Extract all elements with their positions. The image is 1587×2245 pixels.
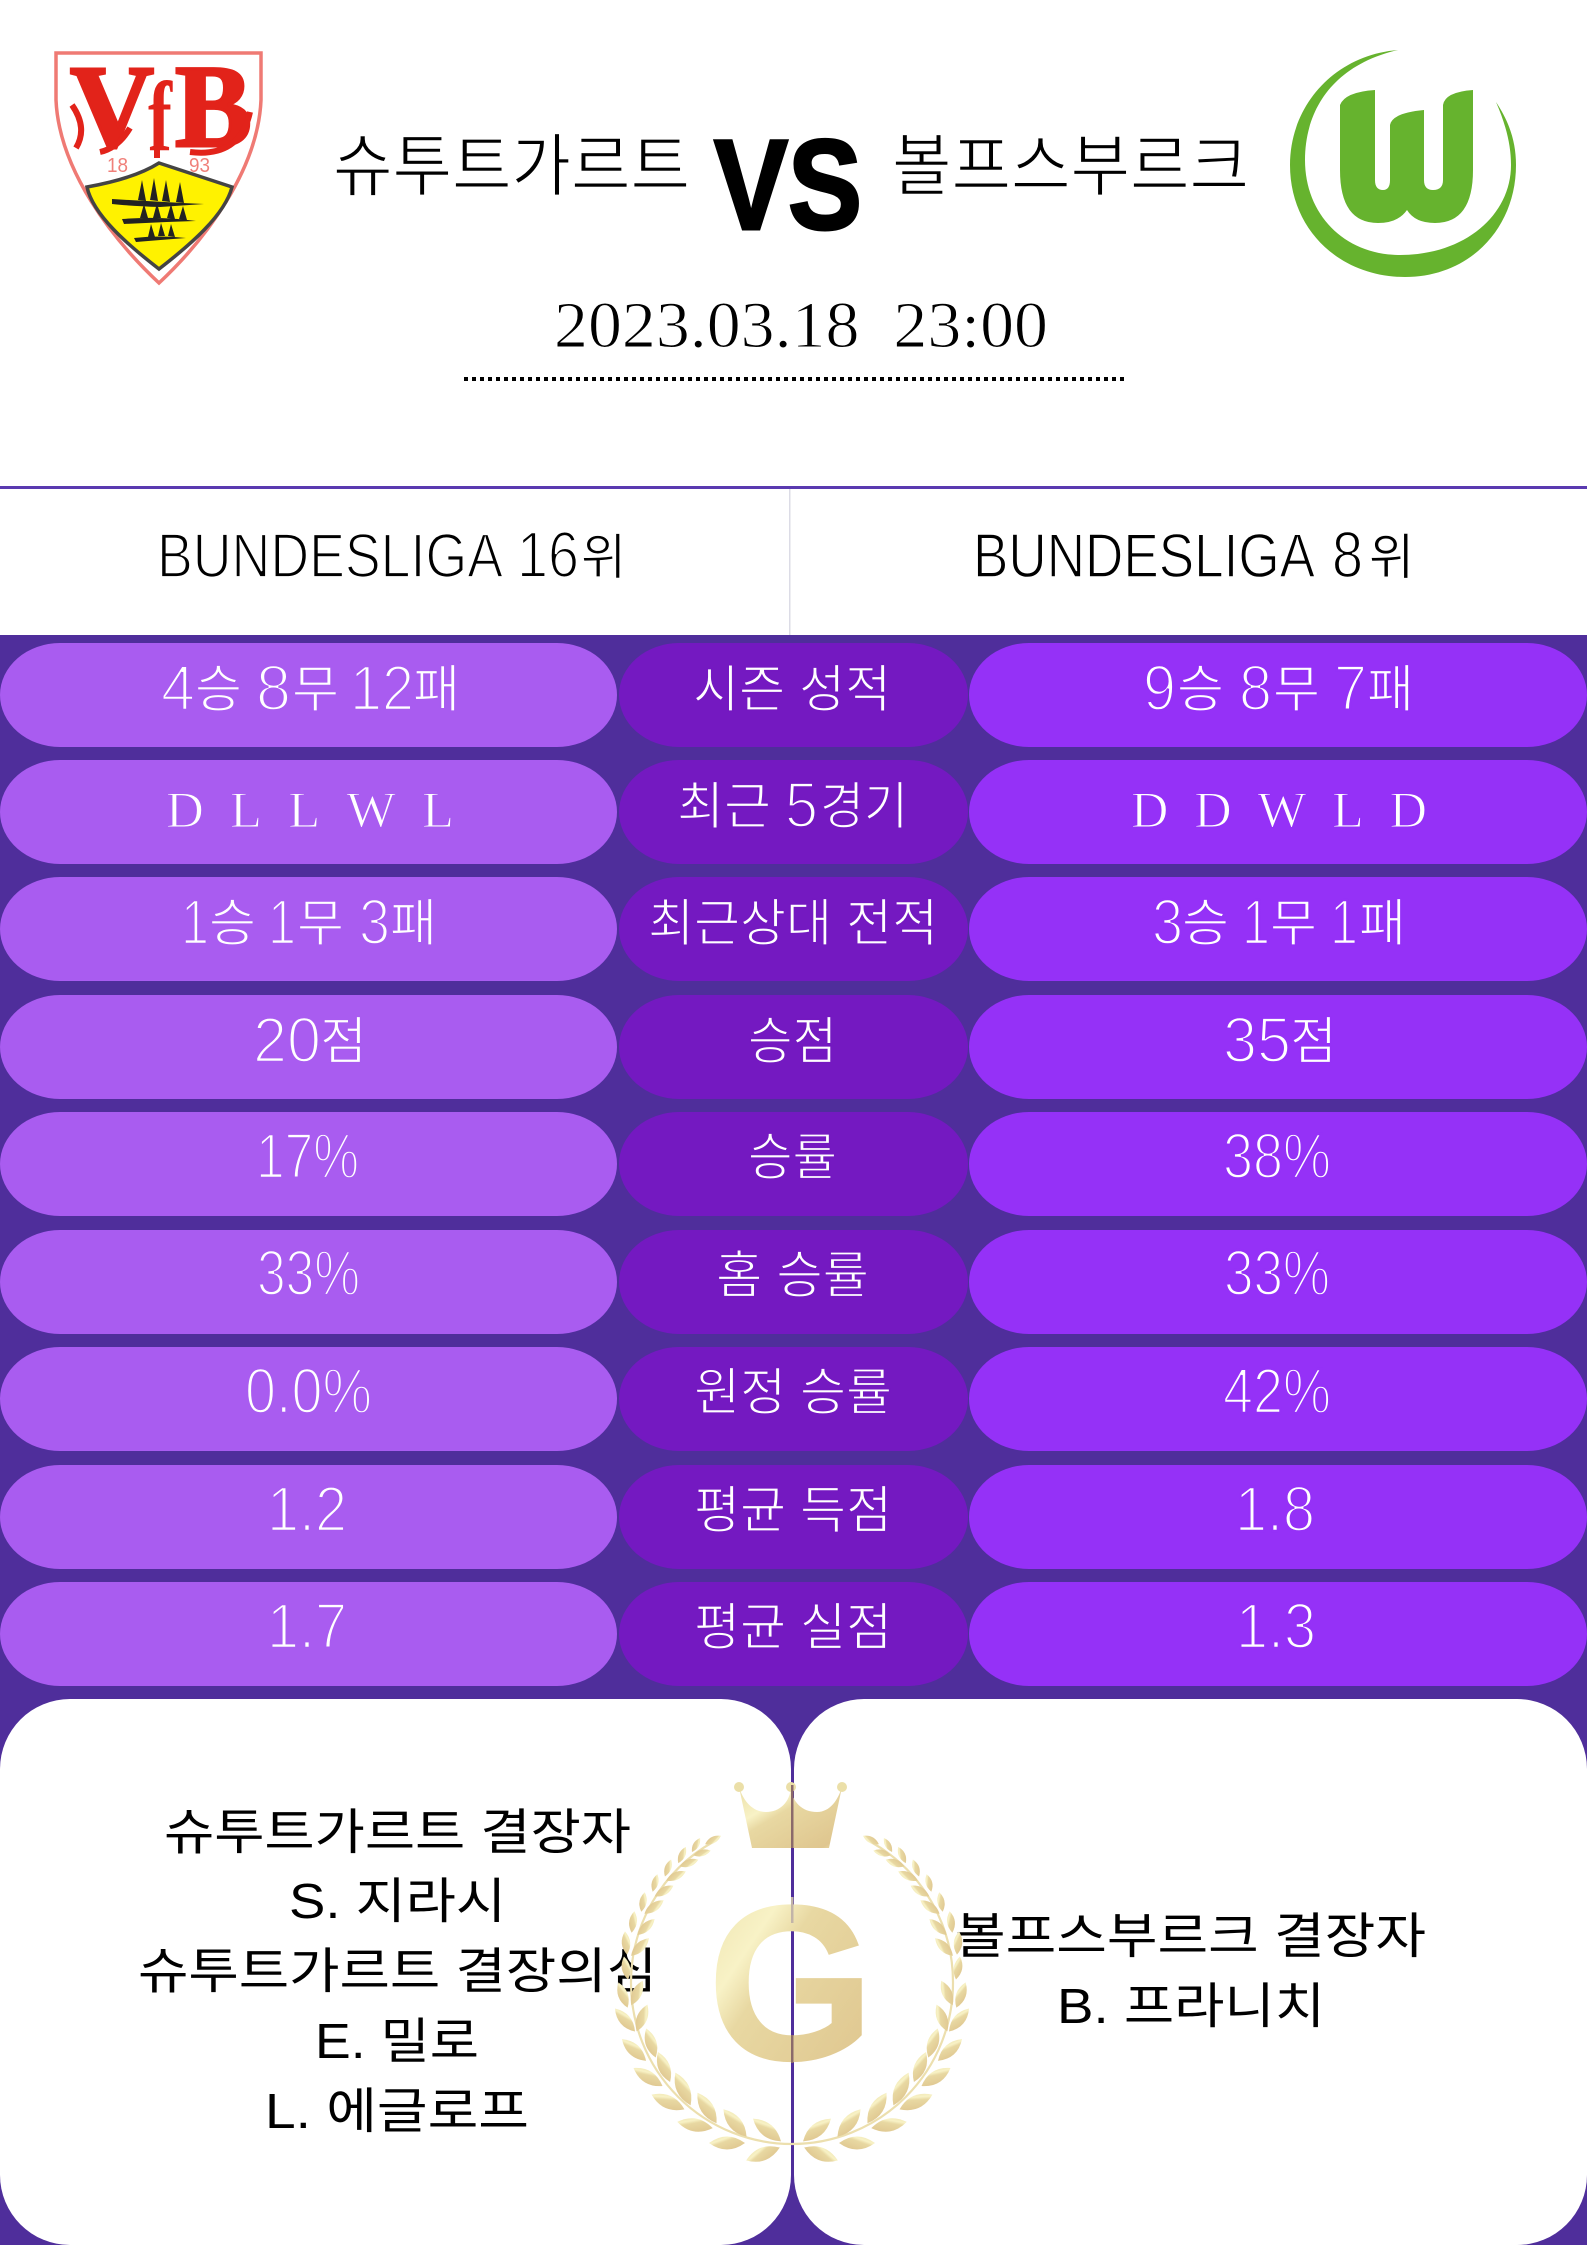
icon: VfL Wolfsburg crest <box>1290 50 1516 277</box>
stat row: away win rate: 원정 승률 <box>694 1364 892 1421</box>
icon: VfB Stuttgart crest: V <box>70 41 154 172</box>
text: away absences list: 볼프스부르크 결장자 <box>955 1910 1426 1964</box>
stat row: points <box>0 995 1587 1099</box>
stat row: season record: 4 <box>161 652 195 724</box>
stat row: points: 승점 <box>748 1013 837 1070</box>
stat row: win rate: 38% <box>1223 1120 1331 1192</box>
icon: VfB Stuttgart crest: f <box>148 61 173 172</box>
stat row: season record: 8 <box>256 652 291 724</box>
text: home absences list: 슈투트가르트 결장자 <box>164 1806 631 1860</box>
text: home absences list: S. 지라시 <box>289 1875 506 1929</box>
stat row: points: 점 <box>1290 1013 1337 1070</box>
title: away team: 볼프스부르크 <box>892 129 1249 205</box>
stat row: last five games: D L L W L <box>166 783 454 839</box>
stat row: season record: 승 <box>195 661 242 718</box>
stat row: head to head: 1 <box>181 886 209 958</box>
text: home absences list: 슈투트가르트 결장의심 <box>138 1945 657 1999</box>
stat row: win rate <box>0 1112 1587 1216</box>
league rank: away: 위 <box>1369 531 1414 585</box>
icon: VfB Stuttgart crest: B <box>175 41 252 172</box>
league rank: home: 16 <box>517 518 579 591</box>
stat row: home win rate: 33% <box>1224 1237 1330 1309</box>
stats panel background <box>0 635 1587 2245</box>
panel: home absences <box>0 1699 791 2245</box>
stat row: season record: 9 <box>1143 652 1176 724</box>
panel: away absences <box>794 1699 1587 2245</box>
stat row: head to head: 최근상대 전적 <box>648 895 938 952</box>
stat row: season record: 승 <box>1177 661 1224 718</box>
stat row: home win rate: 33% <box>257 1237 360 1309</box>
icon: VfB Stuttgart crest: 93 <box>189 155 210 177</box>
emblem: gold crown wreath G <box>611 1782 973 2167</box>
text: away absences list: B. 프라니치 <box>1057 1980 1325 2034</box>
stat row: head to head <box>0 877 1587 981</box>
league rank: away: BUNDESLIGA <box>973 522 1316 591</box>
stat row: season record: 12 <box>350 652 414 724</box>
text: away absences list <box>955 1910 1426 2034</box>
stat row: goals scored <box>0 1465 1587 1569</box>
stat row: goals conceded: 평균 실점 <box>694 1599 892 1656</box>
stat row: points: 20 <box>253 1004 321 1076</box>
stat row: head to head: 무 <box>297 895 344 952</box>
text: home absences list: L. 에글로프 <box>265 2085 529 2139</box>
stat row: win rate: 승률 <box>748 1129 837 1186</box>
stat row: head to head: 1 <box>268 886 296 958</box>
stat row: last five games: 경기 <box>820 778 908 835</box>
league rank: home: 위 <box>581 531 626 585</box>
match date: 2023.03.18 23:00 <box>554 289 1048 362</box>
icon: VfB Stuttgart crest <box>56 41 261 283</box>
title: home team: 슈투트가르트 <box>333 129 690 205</box>
stat row: last five games: 최근 <box>677 778 771 835</box>
stat row: away win rate: 42% <box>1223 1355 1331 1427</box>
text: home absences list: E. 밀로 <box>315 2015 479 2069</box>
stat row: last five games: D D W L D <box>1131 783 1427 839</box>
column divider <box>789 489 790 635</box>
stat row: goals scored: 1.2 <box>267 1473 347 1545</box>
dotted underline <box>464 377 1126 381</box>
stat row: season record: 패 <box>413 661 460 718</box>
stat row: away win rate: 0.0% <box>245 1355 372 1427</box>
stat row: points: 35 <box>1223 1004 1291 1076</box>
stat row: win rate: 17% <box>256 1120 359 1192</box>
stat row: head to head: 패 <box>1359 895 1406 952</box>
text: home absences list <box>138 1806 657 2139</box>
stat row: season record <box>0 643 1587 747</box>
stat row: season record: 8 <box>1239 652 1272 724</box>
top divider line <box>0 486 1587 489</box>
icon: laurel wreath left <box>611 1833 792 2167</box>
stat row: points: 점 <box>320 1013 367 1070</box>
stat row: season record: 7 <box>1334 652 1367 724</box>
stat row: away win rate <box>0 1347 1587 1451</box>
stat row: goals conceded <box>0 1582 1587 1686</box>
stat row: head to head: 승 <box>209 895 256 952</box>
league rank: away: 8 <box>1332 518 1363 591</box>
stat row: head to head: 패 <box>390 895 437 952</box>
stat row: head to head: 3 <box>359 886 390 958</box>
stat row: season record: 무 <box>292 661 339 718</box>
stat row: last five games <box>0 760 1587 864</box>
stat row: season record: 시즌 성적 <box>693 661 891 718</box>
stat row: last five games: 5 <box>785 769 818 841</box>
stat row: home win rate: 홈 승률 <box>716 1247 869 1304</box>
stat row: goals scored: 1.8 <box>1235 1473 1315 1545</box>
stat row: home win rate <box>0 1230 1587 1334</box>
league rank: home: BUNDESLIGA <box>157 522 504 591</box>
stat row: goals conceded: 1.7 <box>267 1590 347 1662</box>
stat row: head to head: 무 <box>1270 895 1317 952</box>
stat row: goals scored: 평균 득점 <box>694 1482 892 1539</box>
stat row: head to head: 1 <box>1330 886 1358 958</box>
icon: crown <box>734 1782 847 1848</box>
letter G: G <box>708 1860 874 2106</box>
stat row: head to head: 1 <box>1242 886 1270 958</box>
stat row: head to head: 승 <box>1182 895 1229 952</box>
title: VS: VS <box>714 114 862 257</box>
icon: VfB Stuttgart crest: 18 <box>107 155 128 177</box>
stat row: season record: 패 <box>1367 661 1414 718</box>
stat row: goals conceded: 1.3 <box>1236 1590 1316 1662</box>
icon: laurel wreath right <box>792 1833 973 2167</box>
stat row: season record: 무 <box>1273 661 1320 718</box>
header background <box>0 0 1587 635</box>
stat row: head to head: 3 <box>1152 886 1183 958</box>
